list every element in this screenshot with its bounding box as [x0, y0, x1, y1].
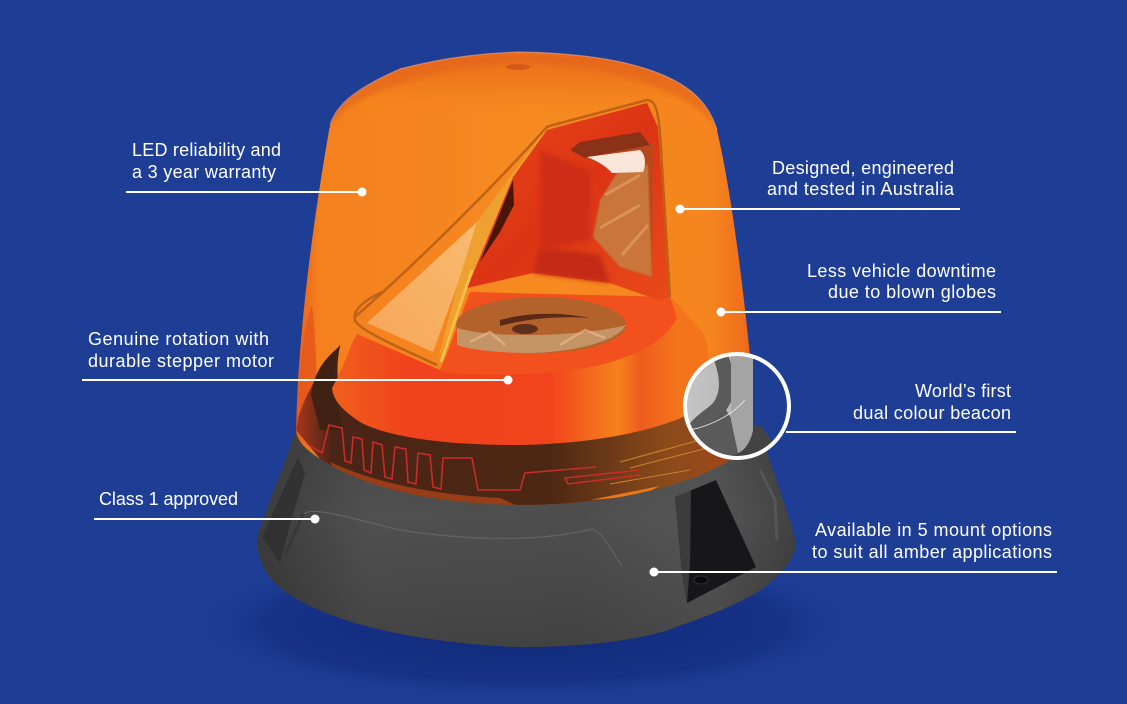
callout text: a 3 year warranty — [132, 162, 276, 182]
beacon base — [258, 430, 795, 647]
callout text: Designed, engineered — [772, 158, 954, 178]
callout text: Less vehicle downtime — [807, 261, 996, 281]
callout: Designed in Australia — [676, 158, 960, 214]
base panel edge — [304, 511, 622, 566]
lens window — [456, 297, 626, 353]
left side lens edge — [296, 306, 316, 428]
callout text: Class 1 approved — [99, 489, 238, 509]
callout: World's first dual colour — [786, 381, 1016, 432]
mount slot — [675, 480, 756, 603]
dome upper rim — [332, 55, 716, 125]
right base highlight — [760, 470, 777, 540]
callout text: Genuine rotation with — [88, 329, 269, 349]
infographic: beacon features — [82, 51, 1057, 688]
callout text: LED reliability and — [132, 140, 281, 160]
base behind lens — [728, 425, 772, 456]
reflector cone — [332, 297, 708, 445]
dome outline highlight — [330, 52, 717, 130]
callout text: due to blown globes — [828, 282, 996, 302]
upper LED window — [586, 143, 653, 277]
light highlight — [587, 150, 645, 173]
callout: Genuine rotation — [82, 329, 512, 384]
inner dark band — [296, 345, 757, 507]
callout text: and tested in Australia — [767, 179, 955, 199]
reflector shadow sliver — [480, 180, 514, 262]
callout text: to suit all amber applications — [812, 542, 1052, 562]
callout text: durable stepper motor — [88, 351, 274, 371]
callout text: Available in 5 mount options — [815, 520, 1052, 540]
dual colour magnified circle — [683, 352, 791, 460]
callout text: dual colour beacon — [853, 403, 1011, 423]
reflector body — [467, 103, 670, 300]
band streaks — [610, 440, 715, 484]
drop shadow under beacon — [165, 545, 885, 704]
callout: Less vehicle downtime — [716, 261, 1001, 316]
callout: Class 1 approved — [94, 489, 320, 524]
left base recess — [262, 457, 305, 563]
callout: 5 mount options — [650, 520, 1057, 576]
amber dome lens — [290, 50, 770, 507]
reflector light triangle — [367, 222, 477, 352]
reflector rim strip — [437, 130, 547, 363]
beacon product image — [258, 50, 795, 647]
circuit pattern — [309, 425, 640, 490]
callout: LED reliability — [126, 140, 366, 196]
callout text: World’s first — [915, 381, 1011, 401]
